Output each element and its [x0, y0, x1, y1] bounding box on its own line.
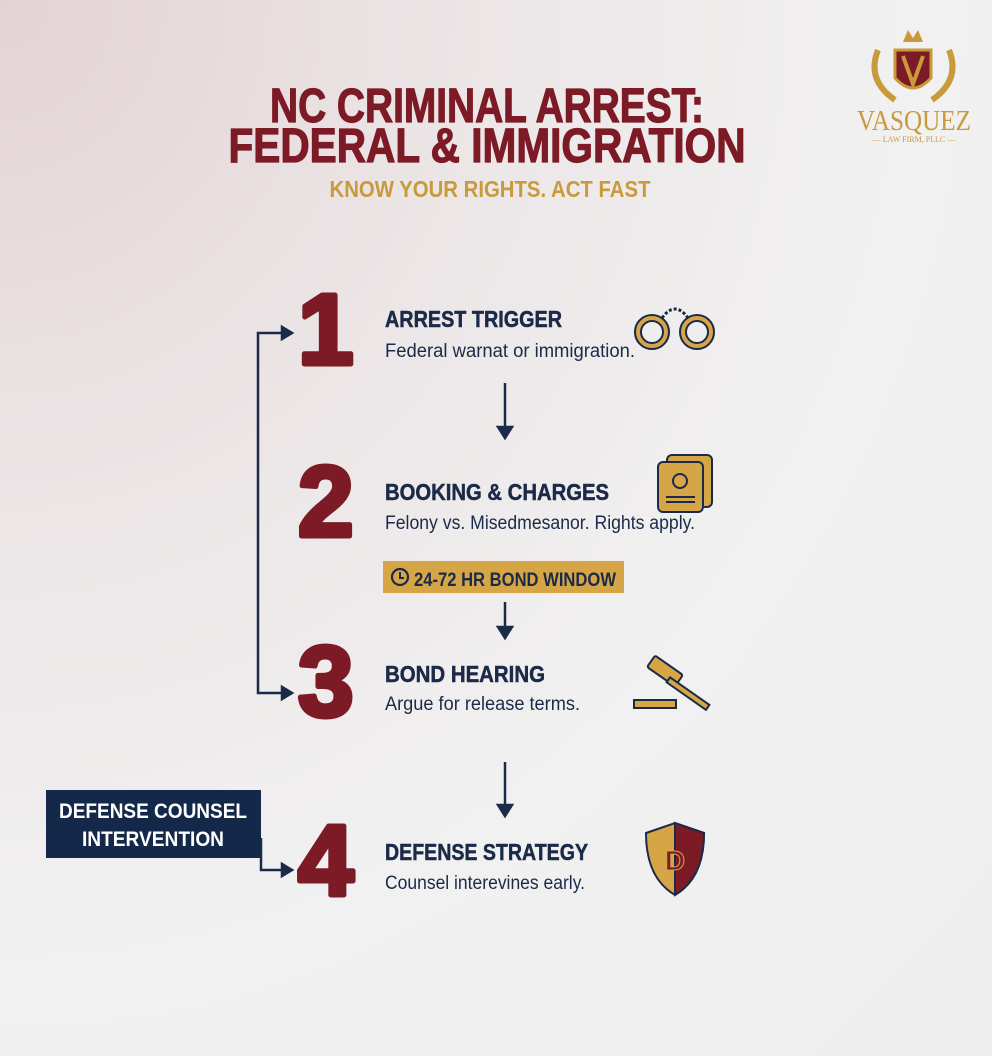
- step numbers: [298, 274, 354, 917]
- defense counsel box: [46, 790, 261, 858]
- arrow 3: [498, 762, 512, 816]
- step numbers: 1: [298, 274, 354, 386]
- arrow 2: [498, 602, 512, 638]
- left bracket arrow: [258, 327, 292, 699]
- icon: gavel: [634, 656, 709, 710]
- step 4 text: Counsel interevines early.: [385, 873, 585, 894]
- logo: [857, 30, 971, 144]
- step 1 text: Federal warnat or immigration.: [385, 341, 635, 362]
- step 3 text: [385, 661, 580, 715]
- logo: VASQUEZ: [857, 106, 971, 137]
- logo: — LAW FIRM, PLLC —: [872, 135, 956, 144]
- step numbers: 4: [298, 805, 354, 917]
- step 3 text: BOND HEARING: [385, 661, 545, 687]
- icon: shield: D: [665, 845, 685, 876]
- title: FEDERAL & IMMIGRATION: [228, 120, 746, 173]
- arrow: box to step 4: [261, 838, 292, 876]
- step 2 text: Felony vs. Misedmesanor. Rights apply.: [385, 513, 695, 534]
- step 2 text: [385, 479, 695, 534]
- icon: handcuffs: [635, 309, 714, 349]
- step 4 text: DEFENSE STRATEGY: [385, 839, 588, 865]
- badge: bond window: [383, 561, 624, 593]
- step numbers: 2: [298, 446, 354, 558]
- icon: shield: [646, 823, 704, 895]
- icon: document: [658, 455, 712, 512]
- arrow 1: [498, 383, 512, 438]
- step 4 text: [385, 839, 588, 894]
- step 3 text: Argue for release terms.: [385, 694, 580, 715]
- subtitle: KNOW YOUR RIGHTS. ACT FAST: [330, 176, 650, 202]
- step 1 text: ARREST TRIGGER: [385, 306, 562, 332]
- step 2 text: BOOKING & CHARGES: [385, 479, 609, 505]
- title: NC CRIMINAL ARREST:: [270, 80, 704, 133]
- step numbers: 3: [298, 626, 354, 738]
- defense counsel box: INTERVENTION: [82, 828, 224, 851]
- title: [228, 80, 746, 173]
- defense counsel box: DEFENSE COUNSEL: [59, 800, 247, 823]
- badge: bond window: 24-72 HR BOND WINDOW: [414, 570, 616, 591]
- step 1 text: [385, 306, 635, 362]
